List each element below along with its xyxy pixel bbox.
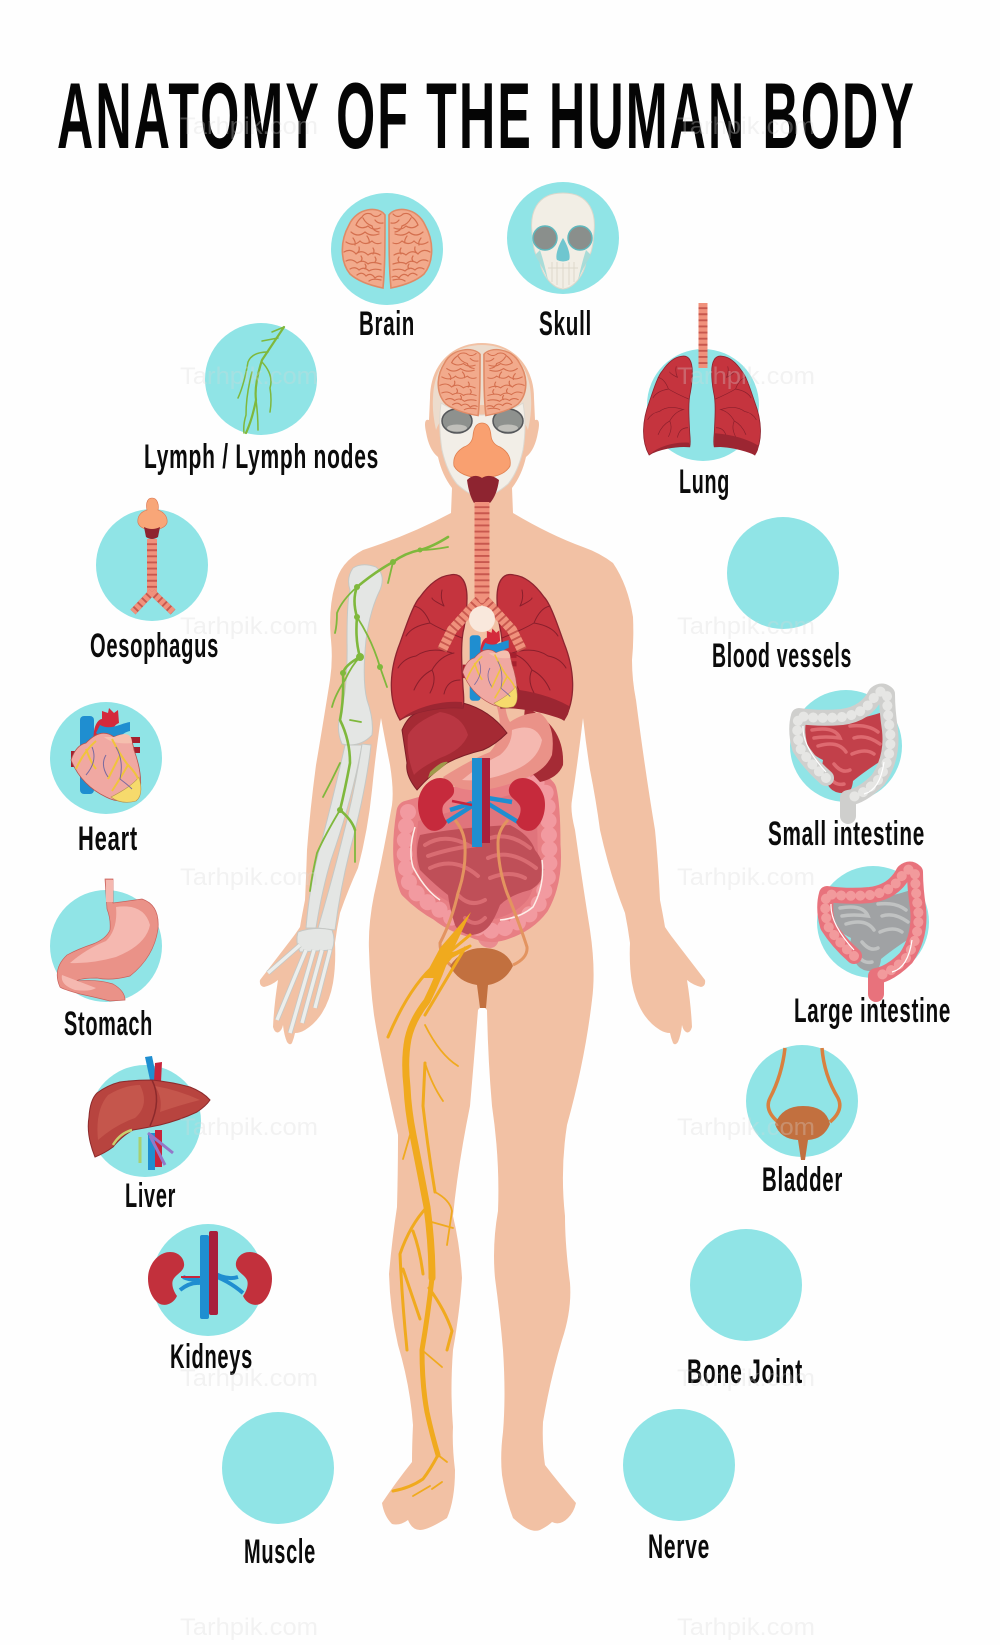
label: bladder: Bladder: [762, 1161, 843, 1199]
label: muscle: Muscle: [244, 1533, 316, 1571]
label: liver: Liver: [125, 1177, 176, 1215]
watermarks: Tarhpik.com: [677, 1114, 815, 1141]
large intestine: [405, 780, 550, 948]
lymph vessels: [310, 537, 448, 891]
watermarks: Tarhpik.com: [180, 613, 318, 640]
label: heart: Heart: [78, 820, 138, 858]
label: oesophagus: Oesophagus: [90, 627, 219, 665]
label: brain: Brain: [359, 305, 415, 343]
heart: [463, 629, 517, 708]
panel: nerve icon: [623, 1409, 735, 1521]
label: kidneys: Kidneys: [170, 1338, 253, 1376]
watermarks: Tarhpik.com: [677, 864, 815, 891]
brain in head: [438, 350, 526, 416]
body silhouette: [260, 343, 705, 1531]
label: stomach: Stomach: [64, 1005, 153, 1043]
watermarks: Tarhpik.com: [677, 1614, 815, 1641]
label: skull: Skull: [539, 305, 592, 343]
panel: muscle icon: [222, 1412, 334, 1524]
panel: kidneys icon: [148, 1224, 272, 1336]
bladder: [450, 948, 513, 1008]
label: bone joint: Bone Joint: [687, 1353, 803, 1391]
watermarks: [180, 113, 815, 1641]
nasal cavity: [454, 423, 510, 478]
lungs: [391, 575, 573, 720]
panel: heart icon: [50, 702, 162, 814]
head skull: [440, 403, 525, 498]
label: nerve: Nerve: [648, 1528, 710, 1566]
label: lung: Lung: [679, 463, 730, 501]
eye sockets: [442, 409, 523, 433]
larynx: [467, 476, 499, 503]
watermarks: Tarhpik.com: [180, 1614, 318, 1641]
panel: lymph icon: [205, 323, 317, 435]
panel: liver icon: [88, 1056, 210, 1177]
panel: small intestine icon: [790, 690, 902, 816]
panel: blood vessels icon: [727, 517, 839, 629]
watermarks: Tarhpik.com: [180, 1365, 318, 1392]
bronchi: [442, 597, 522, 650]
stomach: [443, 703, 563, 790]
panel: skull icon: [507, 182, 619, 294]
panel: bone joint icon: [690, 1229, 802, 1341]
aorta and renal vessels: [447, 758, 518, 847]
watermarks: Tarhpik.com: [677, 613, 815, 640]
kidneys: [418, 778, 545, 831]
watermarks: Tarhpik.com: [180, 1114, 318, 1141]
panel: large intestine icon: [817, 866, 929, 994]
watermarks: Tarhpik.com: [677, 1365, 815, 1392]
watermarks: Tarhpik.com: [677, 363, 815, 390]
panel: stomach icon: [50, 879, 162, 1002]
panel: bladder icon: [746, 1045, 858, 1160]
label: lymph: Lymph / Lymph nodes: [144, 438, 379, 476]
panel: brain icon: [331, 193, 443, 305]
watermarks: Tarhpik.com: [677, 113, 815, 140]
panel: lung icon: [644, 303, 760, 461]
watermarks: Tarhpik.com: [180, 864, 318, 891]
watermarks: Tarhpik.com: [180, 113, 318, 140]
sciatic nerve: [388, 912, 471, 1496]
watermarks: Tarhpik.com: [180, 363, 318, 390]
arm bones: [268, 565, 382, 1033]
trachea: [474, 502, 490, 597]
label: blood vessels: Blood vessels: [712, 637, 852, 675]
human body figure: [260, 343, 705, 1531]
panel: oesophagus icon: [96, 498, 208, 621]
ureters: [440, 820, 527, 967]
liver: [402, 703, 507, 790]
small intestine: [411, 825, 543, 935]
head skull dome: [433, 345, 531, 430]
